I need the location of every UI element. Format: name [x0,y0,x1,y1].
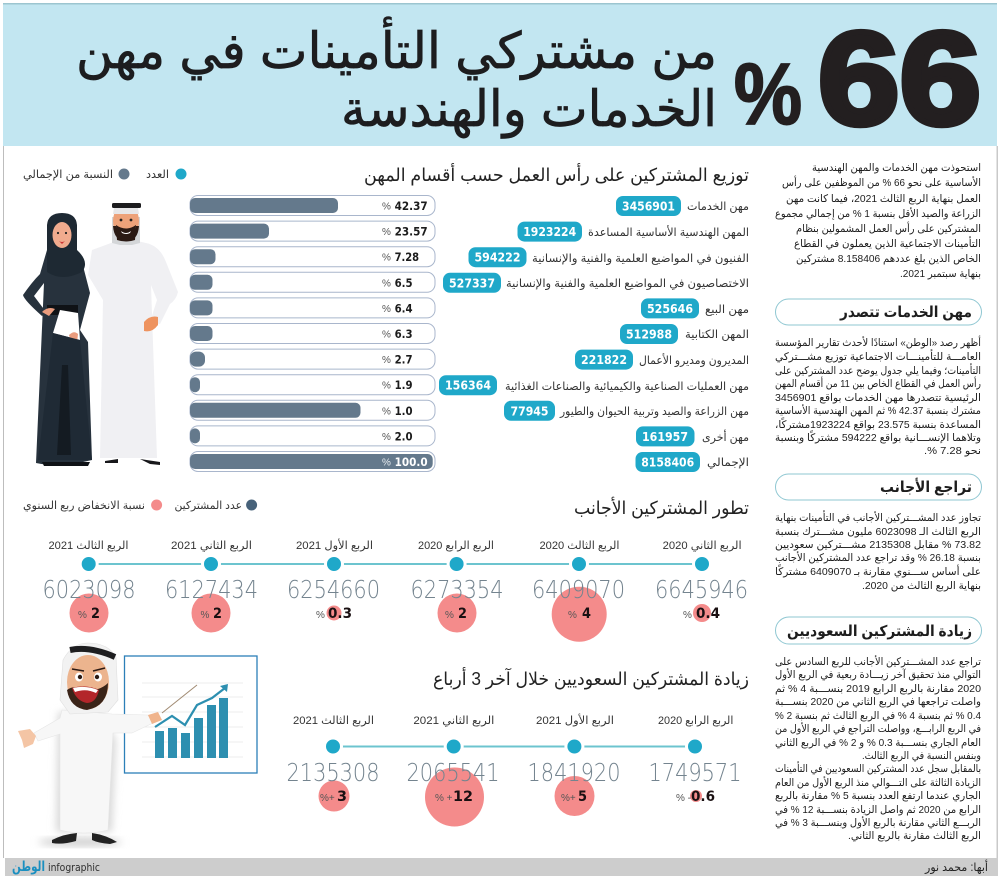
paragraph: services: أظهر رصد «الوطن» استنادًا لأحدث تقارير المؤسسة [775,335,981,349]
change percentages: 5 [578,789,587,805]
paragraph: saudis: الربع الثالث مقارنة بالربع الثاني. [848,830,981,842]
paragraph: saudis: العام الجاري بنســـبة 0.3 % و 2 % في الربع الثاني [775,737,981,749]
paragraph: services: نحو 7.28 %. [924,445,981,457]
occupation labels: المديرون ومديرو الأعمال [639,353,749,368]
percentage values: % [382,278,391,289]
paragraph: saudis: واصلت تراجعها في الربع الثاني من 2020 بنســـبة [775,696,981,708]
percentage values: % [382,227,391,238]
quarter labels: الربع الثاني 2021 [171,540,252,552]
count values: 527337 [449,276,495,290]
occupation labels [505,201,749,469]
illustration: presenter with chart board [18,643,257,846]
paragraph: services: رأس العمل في القطاع الخاص بين 11 من أقسام المهن [775,376,981,390]
occupation labels: مهن الزراعة والصيد وتربية الحيوان والطيور [559,406,749,419]
panel: distribution by occupation [23,163,749,472]
woman in black abaya [23,213,92,466]
decline percentages: % [683,610,692,621]
pill heading: saudis increase: زيادة المشتركين السعوديين [787,623,972,640]
intro paragraph [775,162,981,280]
illustration: man and woman [23,203,178,466]
percentage values: % [382,253,391,264]
subscriber counts: 6127434 [165,575,258,604]
paragraph: foreigners: بنسبة 26.18 % وقد تراجع عدد المشتركين الأجانب [775,551,981,564]
count values: 221822 [581,353,627,367]
occupation labels: المهن الكتابية [685,329,749,342]
quarter labels: الربع الرابع 2020 [658,715,733,727]
intro paragraph: الزراعة والصيد الأقل بنسبة 1 % من إجمالي مجموع [775,207,981,220]
big number 66% [734,5,981,152]
percentage values: 7.28 [395,250,419,264]
quarter labels: الربع الثالث 2021 [48,540,128,552]
occupation labels: الإجمالي [707,457,749,469]
percentage values: 1.0 [395,404,413,418]
paragraph: foreigners: على أساس ســـنوي مقارنة بـ 6409070 مشتركًا [775,564,981,578]
subscriber counts: 6645946 [655,575,748,604]
text column: right sidebar [775,162,982,842]
percentage values: % [382,330,391,340]
change percentages: % + [435,793,453,804]
panel: foreign subscribers timeline [23,497,749,642]
decline percentages: 2 [458,606,467,622]
percentage values: 2.7 [395,353,413,367]
percentage values: % [382,381,391,392]
percentage values: % [382,304,391,315]
occupation labels: الفنيون في المواضيع العلمية والفنية والإنسانية [532,253,749,266]
subscriber counts: 1841920 [528,758,620,787]
decline percentages: 0.4 [696,606,720,622]
pill heading: saudis increase [776,617,982,644]
paragraph: foreigners: 73.82 % مقابل 2135308 مشـــتركين سعوديين [775,539,981,551]
heading: saudi subscribers: زيادة المشتركين السعوديين خلال آخر 3 أرباع [433,667,749,690]
quarter labels: الربع الثالث 2020 [540,540,620,552]
quarter labels: الربع الأول 2021 [296,538,373,552]
occupation labels: مهن العمليات الصناعية والكيميائية والصناعات الغذائية [505,381,749,394]
intro paragraph: الأساسية على نحو 66 % من الموظفين على رأس [782,175,981,189]
legend: foreign subscribers: عدد المشتركين [174,500,242,512]
paragraph: saudis: 0.4 % ثم بنسبة 4 % في الربع الثالث ثم بنسبة 2 % [775,710,981,722]
heading: foreign subscribers: تطور المشتركين الأجانب [574,497,749,519]
legend: foreign subscribers: نسبة الانخفاض ربع السنوي [23,500,145,512]
intro paragraph: العمل بنهاية الربع الثالث 2021، فيما كانت مهن [786,193,981,205]
decline percentages: 2 [213,606,222,622]
quarter labels: الربع الثاني 2021 [413,715,494,727]
paragraph: saudis: الزيادة الثالثة على التـــوالي منذ الربع الأول من العام [775,776,981,789]
occupation labels: مهن البيع [705,304,749,317]
paragraph: services: مشترك بنسبة 42.37 % ثم المهن الهندسية الأساسية [775,404,981,417]
quarter labels [293,713,733,727]
logo: infographic [48,861,100,874]
percentage values: 23.57 [395,225,428,239]
paragraph: saudis: التوالي منذ تحقيق آخر زيـــادة ربعية في الربع الأول [775,668,981,681]
paragraph: services: المساعدة بنسبة 23.575 بواقع 1923224مشتركًا، [775,417,981,431]
legend: distribution: النسبة من الإجمالي [23,169,113,182]
intro paragraph: التأمينات الاجتماعية الذين يعملون في القطاع [794,236,981,250]
bar chart: share of total [190,196,435,472]
count values: 1923224 [523,225,576,239]
subscriber counts: 1749571 [648,758,742,787]
subscriber counts: 6409070 [532,575,625,604]
count values [445,200,694,470]
quarter labels [48,538,742,552]
paragraph: services: وتلاهما الإنســـانية بواقع 594222 مشتركًا وبنسبة [775,430,981,444]
paragraph: saudis: الجاري عندما ارتفع العدد بنسبة 5 % مقارنة بالربع [775,790,981,802]
logo [12,858,100,875]
change percentages: 3 [337,789,347,805]
percentage values: % [382,406,391,417]
paragraph: services: الرئيسية تتصدرها مهن الخدمات بواقع 3456901 [775,392,981,404]
count values: 8158406 [641,456,694,470]
occupation labels: مهن الخدمات [687,201,749,214]
legend: distribution: العدد [146,169,169,181]
percentage values: % [382,355,391,366]
percentage values [382,199,428,469]
count values: 525646 [647,302,693,316]
logo: الوطن [12,858,45,875]
paragraph: services: العامـــة للتأمينـــات الاجتماعية توزيع مشـــتركي [775,349,981,363]
subscriber counts: 2065541 [406,758,500,787]
timeline line and dots [324,738,704,755]
intro paragraph: الخاص الذين بلغ عددهم 8.158406 مشتركين [796,253,981,265]
paragraph: saudis: تراجع عدد المشـــتركين الأجانب للربع السادس على [775,655,981,668]
percentage values: 42.37 [395,199,428,213]
occupation labels: مهن أخرى [702,429,749,445]
quarter labels: الربع الرابع 2020 [418,540,494,552]
blue count pills [439,196,700,472]
change percentages: %+ [320,793,335,804]
subscriber counts [42,575,748,604]
paragraph: foreigners: بنهاية الربع الثالث من 2020. [862,580,981,592]
decline percentages: % [78,610,87,621]
intro paragraph: المشتركين على رأس العمل المشمولين بنظام [796,221,981,235]
change percentages: 12 [453,789,473,805]
count values: 156364 [445,379,491,393]
subscriber counts: 6023098 [42,575,136,604]
percentage values: 100.0 [395,455,428,469]
bubbles: quarterly decline [70,587,711,642]
pill heading: services lead [776,299,982,325]
occupation labels: الاختصاصيون في المواضيع العلمية والفنية والإنسانية [506,278,749,291]
paragraph: saudis: الرابع من 2020 ثم واصل الزيادة بنســـبة 12 % في [775,804,981,816]
title: من مشتركي التأمينات في مهن [76,16,717,81]
header banner [3,3,997,152]
decline percentages: % [316,610,325,621]
intro paragraph: استحوذت مهن الخدمات والمهن الهندسية [812,162,981,174]
paragraph: foreigners: الربع الثالث الـ 6023098 مليون مشـــترك بنسبة [775,526,981,538]
paragraph: saudis: وبنفس النسبة في الربع الثالث. [862,750,981,762]
change percentages: 0.6 [691,789,715,805]
percentage values: % [382,202,391,212]
pill heading: foreigners decline: تراجع الأجانب [880,478,972,496]
big number 66%: 66 [818,5,981,152]
quarter labels: الربع الأول 2021 [536,713,614,727]
change percentages: % - [676,793,691,804]
paragraph: foreigners [775,510,981,592]
change percentages: %+ [561,793,576,804]
subscriber counts [286,758,742,787]
paragraph: services [775,335,981,457]
title: الخدمات والهندسة [341,81,717,139]
percentage values: 6.4 [395,301,413,315]
paragraph: saudis: 2020 مقارنة بالربع الرابع 2019 بنســـبة 4 % ثم [775,683,981,695]
count values: 3456901 [622,200,675,214]
intro paragraph: بنهاية سبتمبر 2021. [900,268,981,280]
decline percentages [78,606,720,622]
change percentages [320,789,715,805]
footer bar [5,858,998,876]
subscriber counts: 6254660 [287,575,380,604]
panel: saudi subscribers timeline [286,667,749,826]
paragraph: saudis: الربـــع الثاني مقارنة بالربع الأول وبنســـبة 3 % في [775,816,981,829]
byline: أبها: محمد نور [924,859,988,875]
decline percentages: % [568,610,577,621]
percentage values: % [382,432,391,443]
count values: 512988 [626,328,672,342]
pill heading: foreigners decline [776,474,982,500]
percentage values: 6.5 [395,276,413,290]
decline percentages: % [200,610,210,621]
count values: 594222 [474,251,520,265]
chart board [124,656,257,773]
legend: foreign subscribers [23,500,257,512]
occupation labels: المهن الهندسية الأساسية المساعدة [588,225,749,240]
paragraph: foreigners: تجاوز عدد المشـــتركين الأجانب في التأمينات بنهاية [775,510,981,524]
man in white thobe [88,203,178,465]
percentage values: 6.3 [395,327,413,341]
decline percentages: 4 [582,606,591,622]
heading: distribution: توزيع المشتركين على رأس العمل حسب أقسام المهن [364,163,749,186]
count values: 77945 [510,404,548,418]
decline percentages: 2 [91,606,100,622]
count values: 161957 [642,430,688,444]
paragraph: saudis: في الربع الرابـــع، وواصلت التراجع في الربع الأول من [775,722,981,735]
percentage values: % [382,458,391,468]
quarter labels: الربع الثاني 2020 [663,540,742,552]
timeline line and dots [80,556,710,572]
quarter labels: الربع الثالث 2021 [293,715,374,727]
subscriber counts: 6273354 [410,575,504,604]
legend: distribution [23,168,186,182]
pill heading: services lead: مهن الخدمات تتصدر [839,304,972,321]
presenter figure [18,643,162,846]
title [76,16,717,139]
paragraph: services: التأمينات؛ وفيما يلي جدول يوضح عدد المشتركين على [775,363,981,377]
percentage values: 1.9 [395,378,413,392]
subscriber counts: 2135308 [286,758,380,787]
decline percentages: 0.3 [328,606,352,622]
paragraph: saudis [775,655,981,842]
percentage values: 2.0 [395,429,413,443]
decline percentages: % [445,610,454,621]
big number 66%: % [734,47,802,143]
bubbles: quarterly change [318,768,702,826]
